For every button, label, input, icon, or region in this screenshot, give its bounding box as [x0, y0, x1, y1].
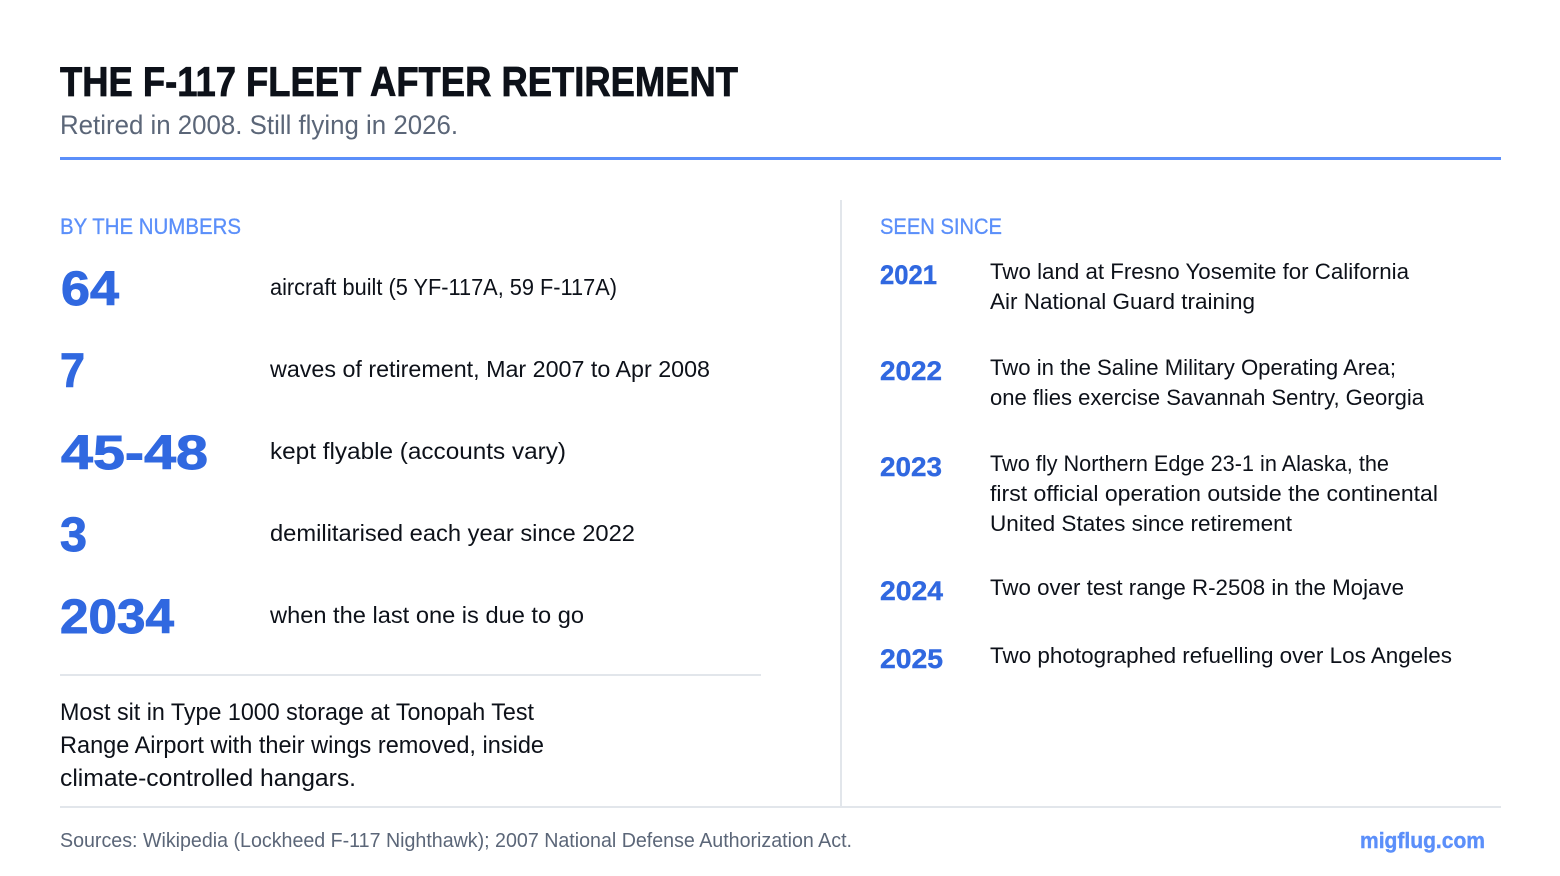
heading: seen since: SEEN SINCE — [880, 214, 1002, 239]
timeline entry: 2025 — [880, 643, 1452, 674]
timeline entry: 2025: Two photographed refuelling over Los Angeles — [990, 643, 1452, 668]
title: THE F-117 FLEET AFTER RETIREMENT — [60, 58, 738, 105]
stat: 2034 last one due to go: when the last one is due to go — [269, 602, 584, 628]
stat: 3 demilitarised each year: demilitarised each year since 2022 — [270, 520, 635, 546]
timeline entry: 2024: 2024 — [880, 576, 943, 606]
panel: seen since — [880, 214, 1452, 674]
stat: 3 demilitarised each year: 3 — [60, 509, 87, 562]
stat: 7 waves of retirement — [60, 345, 710, 398]
timeline entry: 2023: Two fly Northern Edge 23-1 in Alaska, the — [990, 451, 1389, 476]
timeline entry: 2023: United States since retirement — [990, 511, 1292, 536]
storage note — [60, 699, 544, 792]
timeline entry: 2023: 2023 — [880, 452, 942, 482]
stat: 45-48 kept flyable: 45-48 — [61, 427, 208, 480]
stat: 64 aircraft built — [61, 263, 617, 316]
sources footer: Sources: Wikipedia (Lockheed F-117 Nighthawk); 2007 National Defense Authorization Act. — [60, 830, 852, 852]
stat: 7 waves of retirement: waves of retirement, Mar 2007 to Apr 2008 — [269, 356, 710, 382]
stat: 64 aircraft built: 64 — [61, 263, 119, 316]
stat: 2034 last one due to go: 2034 — [60, 591, 174, 644]
storage note: climate-controlled hangars. — [60, 765, 356, 792]
timeline entry: 2021: 2021 — [880, 260, 937, 290]
stat: 2034 last one due to go — [60, 591, 584, 644]
stat: 45-48 kept flyable — [61, 427, 566, 480]
timeline entry: 2022: Two in the Saline Military Operating Area; — [990, 355, 1396, 380]
stat: 7 waves of retirement: 7 — [60, 345, 85, 398]
timeline entry: 2023 — [880, 451, 1438, 536]
panel: by the numbers — [60, 214, 761, 792]
timeline entry: 2021 — [880, 259, 1410, 314]
timeline entry: 2025: 2025 — [880, 644, 943, 674]
timeline entry: 2021: Two land at Fresno Yosemite for California — [990, 259, 1410, 284]
storage note: Most sit in Type 1000 storage at Tonopah Test — [60, 699, 534, 726]
timeline entry: 2022: one flies exercise Savannah Sentry, Georgia — [990, 385, 1425, 410]
timeline entry: 2024 — [880, 575, 1404, 606]
heading: by the numbers: BY THE NUMBERS — [60, 214, 241, 239]
brand: migflug.com: migflug.com — [1360, 828, 1485, 853]
timeline entry: 2024: Two over test range R-2508 in the Mojave — [990, 575, 1404, 600]
stat: 64 aircraft built: aircraft built (5 YF-117A, 59 F-117A) — [270, 274, 617, 300]
timeline entry: 2022 — [880, 355, 1425, 410]
timeline entry: 2021: Air National Guard training — [990, 289, 1255, 314]
stat: 45-48 kept flyable: kept flyable (accounts vary) — [270, 438, 566, 464]
subtitle: Retired in 2008. Still flying in 2026. — [60, 110, 458, 140]
timeline entry: 2023: first official operation outside the continental — [990, 481, 1438, 506]
storage note: Range Airport with their wings removed, inside — [60, 732, 544, 759]
stat: 3 demilitarised each year — [60, 509, 635, 562]
timeline entry: 2022: 2022 — [880, 356, 942, 386]
